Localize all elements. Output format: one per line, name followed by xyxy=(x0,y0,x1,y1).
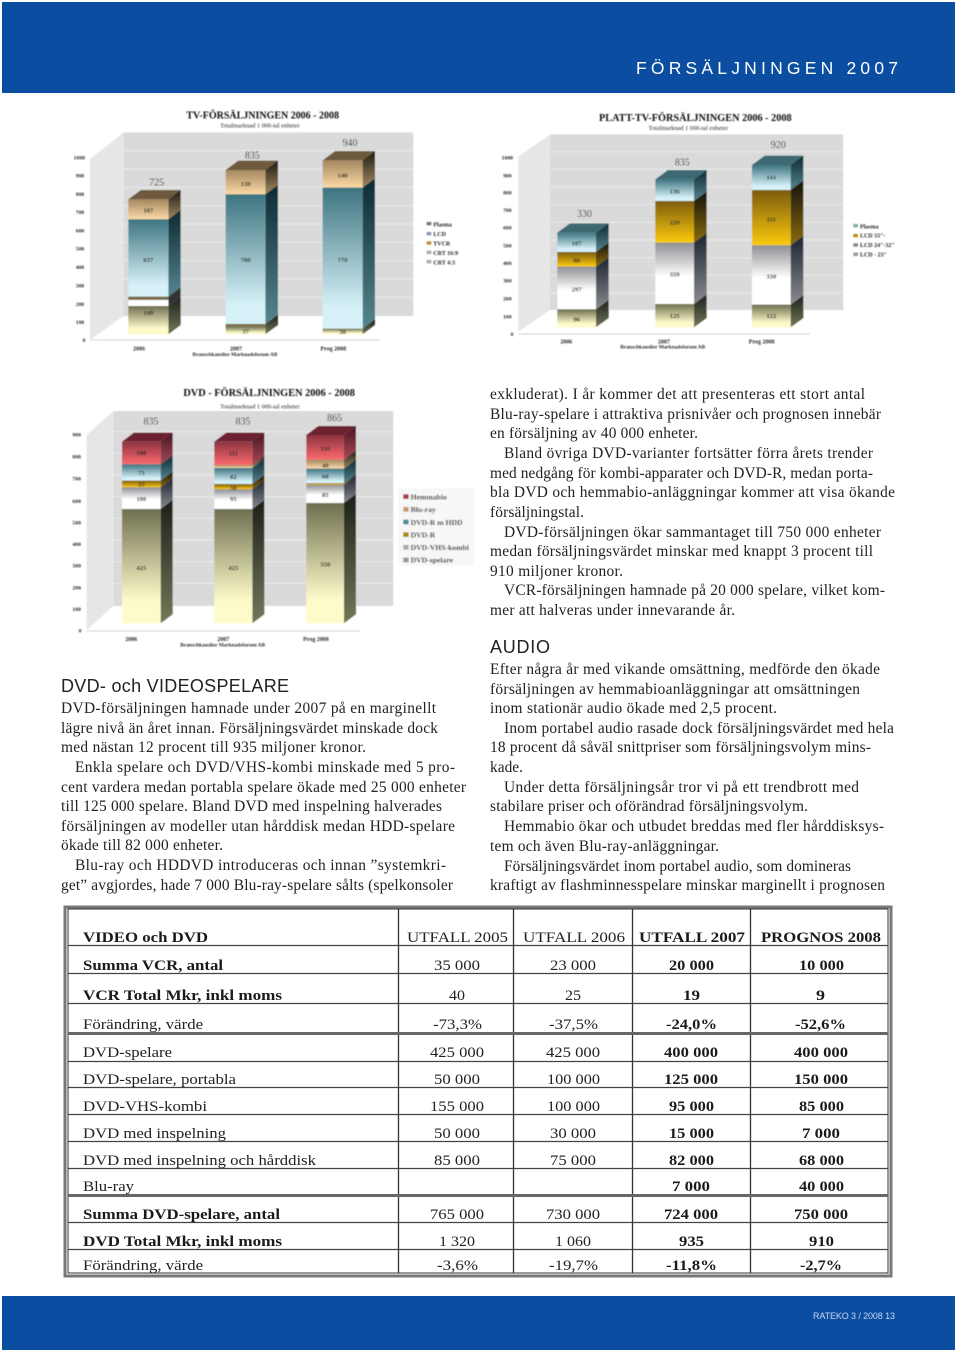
chart: TV-försäljningen 2006-2008: 700 xyxy=(76,210,84,216)
chart: DVD-försäljningen 2006-2008: 75 xyxy=(138,470,145,477)
text block: audio: Hemmabio ökar och utbudet breddas med fler hårddisksys- xyxy=(504,818,884,835)
legend: Hemmabio xyxy=(411,493,447,502)
bar 2006 xyxy=(122,433,173,623)
chart: TV-försäljningen 2006-2008: 140 xyxy=(338,172,348,179)
chart: TV-försäljningen 2006-2008: 2006 xyxy=(133,347,145,353)
chart: Platt-TV-försäljningen 2006-2008: 125 xyxy=(670,313,680,320)
legend xyxy=(398,488,474,566)
table header row: UTFALL 2005 xyxy=(407,930,508,946)
row: Blu-ray xyxy=(83,1179,844,1195)
row: Förändring, värde VCR: Förändring, värde xyxy=(83,1017,203,1033)
row: Summa DVD-spelare, antal: 724 000 xyxy=(664,1207,718,1223)
row: DVD-spelare: 400 000 xyxy=(794,1045,848,1061)
chart: TV-försäljningen 2006-2008: 400 xyxy=(76,265,84,271)
text block: audio: 18 procent då såväl snittpriser som försäljningsvolym mins- xyxy=(490,739,871,756)
row: Blu-ray: 7 000 xyxy=(672,1179,710,1195)
heading: DVD- och VIDEOSPELARE: DVD- och VIDEOSPELARE xyxy=(61,676,289,696)
legend: DVD-R xyxy=(411,530,436,539)
row: Förändring, värde VCR: -52,6% xyxy=(795,1017,846,1033)
row: DVD Total Mkr: DVD Total Mkr, inkl moms xyxy=(83,1234,282,1250)
text block: audio: Under detta försäljningsår tror vi på ett trendbrott med xyxy=(504,779,859,796)
chart: TV-försäljningen 2006-2008: 0 xyxy=(83,338,86,344)
row: DVD Total Mkr: 1 320 xyxy=(439,1234,475,1250)
chart: DVD-försäljningen 2006-2008: 835 xyxy=(235,416,250,427)
row: DVD-VHS-kombi xyxy=(83,1099,844,1115)
text block: DVD continued: medan försäljningsvärdet minskar med knappt 3 procent till xyxy=(490,543,873,560)
chart: Platt-TV-försäljningen 2006-2008: 311 xyxy=(766,216,776,223)
chart: TV-försäljningen 2006-2008: 900 xyxy=(76,174,84,180)
chart: TV-försäljningen 2006-2008: 600 xyxy=(76,228,84,234)
chart: DVD-försäljningen 2006-2008: 85 xyxy=(322,492,329,499)
chart: DVD-försäljningen 2006-2008: Prog 2008 xyxy=(303,637,329,643)
bar Prog 2008 xyxy=(306,426,356,623)
chart: Platt-TV-försäljningen 2006-2008: 700 xyxy=(503,208,512,214)
chart: DVD-försäljningen 2006-2008: 68 xyxy=(322,474,329,481)
bar 2006 xyxy=(128,190,181,334)
row: DVD-VHS-kombi: 100 000 xyxy=(547,1099,600,1115)
chart: DVD-försäljningen 2006-2008: 116 xyxy=(320,445,331,452)
legend: DVD-VHS-kombi xyxy=(411,543,470,552)
chart: Platt-TV-försäljningen 2006-2008: 136 xyxy=(670,188,680,195)
row: Blu-ray: 40 000 xyxy=(799,1179,844,1195)
row: Förändring, värde VCR: -73,3% xyxy=(433,1017,482,1033)
chart: DVD-försäljningen 2006-2008: Branschkanslier Marknadsforum AB xyxy=(180,643,266,649)
row: Summa VCR, antal xyxy=(83,958,844,974)
text block: DVD och videospelare xyxy=(61,700,466,894)
text block: audio: tem och även Blu-ray-anläggningar. xyxy=(490,838,719,855)
chart: TV-försäljningen 2006-2008: 200 xyxy=(76,302,84,308)
chart: DVD-försäljningen 2006-2008: Totalmarknad 1 000-tal enheter xyxy=(220,403,301,410)
table header row xyxy=(83,930,881,946)
chart: DVD-försäljningen 2006-2008: 82 xyxy=(230,474,237,481)
row: DVD-spelare: 425 000 xyxy=(546,1045,600,1061)
chart: DVD-försäljningen 2006-2008: 300 xyxy=(72,564,81,570)
row: DVD-spelare, portabla: 125 000 xyxy=(664,1072,718,1088)
row: DVD med inspelning: DVD med inspelning xyxy=(83,1126,227,1142)
text block: audio: kraftigt av flashminnesspelare minskar marginellt i prognosen xyxy=(490,877,885,894)
text block: audio: Försäljningsvärdet inom portabel audio, som domineras xyxy=(504,858,851,875)
row: DVD-spelare, portabla: DVD-spelare, portabla xyxy=(83,1072,236,1088)
chart: TV-försäljningen 2006-2008: 149 xyxy=(143,310,154,317)
row: VCR Total Mkr xyxy=(83,988,825,1004)
chart: Platt-TV-försäljningen 2006-2008: Branschkanslier Marknadsforum AB xyxy=(620,344,706,350)
text block: audio: stabilare priser och oförändrad försäljningsvolym. xyxy=(490,798,808,815)
text block: DVD continued: försäljningstal. xyxy=(490,504,584,521)
row: DVD Total Mkr: 910 xyxy=(809,1234,834,1250)
row: DVD Total Mkr: 935 xyxy=(679,1234,704,1250)
legend: Plasma xyxy=(860,225,879,231)
row: DVD med inspelning och hårddisk: 82 000 xyxy=(669,1153,714,1169)
table header row: UTFALL 2006 xyxy=(523,930,626,946)
text block: DVD continued: med nedgång för kombi-apparater och DVD-R, medan porta- xyxy=(490,465,873,482)
chart: Platt-TV-försäljningen 2006-2008: 100 xyxy=(503,314,512,320)
text block: DVD och videospelare: lägre nivå än året innan. Försäljningsvärdet minskade dock xyxy=(61,720,438,737)
table header row: UTFALL 2007 xyxy=(639,930,746,946)
chart: TV-försäljningen 2006-2008: Branschkanslier Marknadsforum AB xyxy=(193,352,278,358)
row: DVD-VHS-kombi: 85 000 xyxy=(799,1099,844,1115)
row: DVD-VHS-kombi: 95 000 xyxy=(669,1099,714,1115)
chart: TV-försäljningen 2006-2008: 138 xyxy=(241,181,251,188)
chart: Platt-TV-försäljningen 2006-2008: 2006 xyxy=(560,339,572,345)
chart: TV-försäljningen 2006-2008: 100 xyxy=(76,320,84,326)
row: Förändring, värde DVD xyxy=(83,1258,842,1274)
chart: Platt-TV-försäljningen 2006-2008: 600 xyxy=(503,226,512,232)
chart: Platt-TV-försäljningen 2006-2008: 80 xyxy=(573,257,581,264)
chart: Platt-TV-försäljningen 2006-2008: 1000 xyxy=(502,156,513,162)
table header row: VIDEO och DVD xyxy=(83,930,208,946)
chart: DVD-försäljningen 2006-2008: 400 xyxy=(72,542,81,548)
row: DVD-spelare, portabla: 100 000 xyxy=(547,1072,600,1088)
chart: DVD-försäljningen 2006-2008: 40 xyxy=(322,462,329,469)
text block: DVD continued: mer att halveras under innevarande år. xyxy=(490,602,735,619)
row: Summa VCR, antal: 23 000 xyxy=(550,958,596,974)
row: DVD med inspelning och hårddisk: 68 000 xyxy=(799,1153,844,1169)
row: Förändring, värde VCR xyxy=(83,1017,846,1033)
row: Summa VCR, antal: 10 000 xyxy=(799,958,844,974)
footer band xyxy=(2,1296,955,1350)
row: DVD med inspelning: 15 000 xyxy=(669,1126,714,1142)
row: Summa DVD-spelare, antal: Summa DVD-spelare, antal xyxy=(83,1207,280,1223)
chart: DVD-försäljningen 2006-2008: DVD - FÖRSÄLJNINGEN 2006 - 2008 xyxy=(183,386,355,399)
bar 2006 xyxy=(557,223,609,327)
chart: Platt-TV-försäljningen 2006-2008: 122 xyxy=(766,313,777,320)
text block: DVD och videospelare: försäljningen av modeller utan hårddisk medan HDD-spelare xyxy=(61,818,455,835)
chart: DVD-försäljningen 2006-2008: 111 xyxy=(229,451,238,458)
text block: DVD och videospelare: Blu-ray och HDDVD introduceras och innan ”systemkri- xyxy=(75,857,446,874)
legend: DVD-spelare xyxy=(411,556,454,565)
footer text: RATEKO 3 / 2008 13 xyxy=(813,1311,895,1321)
chart: TV-försäljningen 2006-2008: 107 xyxy=(143,207,154,214)
text block: DVD och videospelare: med nästan 12 procent till 935 miljoner kronor. xyxy=(61,739,366,756)
chart: TV-försäljningen 2006-2008: Totalmarknad 1 000-tal enheter xyxy=(220,122,301,129)
text block: DVD och videospelare: cent vardera medan portabla spelare ökade med 25 000 enheter xyxy=(61,779,466,796)
chart: DVD-försäljningen 2006-2008: 100 xyxy=(136,496,147,503)
bar Prog 2008 xyxy=(323,151,375,334)
chart: Platt-TV-försäljningen 2006-2008 xyxy=(502,111,895,350)
row: VCR Total Mkr: 25 xyxy=(565,988,581,1004)
chart: DVD-försäljningen 2006-2008: 425 xyxy=(136,565,147,572)
text block: DVD continued: Bland övriga DVD-varianter fortsätter förra årets trender xyxy=(504,445,873,462)
row: DVD-spelare: DVD-spelare xyxy=(83,1045,172,1061)
header title: FÖRSÄLJNINGEN 2007 xyxy=(636,58,898,78)
bar 2007 xyxy=(655,170,707,327)
text block: audio: kade. xyxy=(490,759,523,776)
text block: audio xyxy=(490,661,894,894)
chart: DVD-försäljningen 2006-2008: 500 xyxy=(72,521,81,527)
row: Blu-ray: Blu-ray xyxy=(83,1179,135,1195)
bar 2007 xyxy=(226,161,278,334)
legend xyxy=(853,224,895,259)
row: DVD-spelare: 425 000 xyxy=(430,1045,484,1061)
chart: Platt-TV-försäljningen 2006-2008: 330 xyxy=(766,273,777,280)
chart: DVD-försäljningen 2006-2008: 100 xyxy=(72,607,81,613)
legend: LCD xyxy=(433,232,447,238)
chart: DVD-försäljningen 2006-2008: 108 xyxy=(136,450,147,457)
chart: Platt-TV-försäljningen 2006-2008: Totalmarknad 1 000-tal enheter xyxy=(649,125,729,132)
chart: Platt-TV-försäljningen 2006-2008: 800 xyxy=(503,191,512,197)
bar Prog 2008 xyxy=(752,156,803,327)
chart: Platt-TV-försäljningen 2006-2008: 359 xyxy=(670,271,680,278)
chart: TV-försäljningen 2006-2008 xyxy=(74,108,458,358)
chart: DVD-försäljningen 2006-2008: 200 xyxy=(72,585,81,591)
row: Summa DVD-spelare, antal: 730 000 xyxy=(546,1207,600,1223)
row: Summa DVD-spelare, antal xyxy=(83,1207,848,1223)
chart: Platt-TV-försäljningen 2006-2008: 500 xyxy=(503,243,512,249)
row: DVD med inspelning och hårddisk xyxy=(83,1153,844,1169)
chart: DVD-försäljningen 2006-2008: 865 xyxy=(327,413,342,424)
chart: DVD-försäljningen 2006-2008: 95 xyxy=(230,496,237,503)
chart: TV-försäljningen 2006-2008: 300 xyxy=(76,283,84,289)
legend xyxy=(427,222,458,266)
text block: audio: Inom portabel audio rasade dock försäljningsvärdet med hela xyxy=(504,720,894,737)
chart: TV-försäljningen 2006-2008: 30 xyxy=(339,329,347,336)
row: Summa VCR, antal: 20 000 xyxy=(669,958,714,974)
text block: DVD continued: Blu-ray-spelare i attraktiva prisnivåer och prognosen innebär xyxy=(490,406,881,423)
chart: Platt-TV-försäljningen 2006-2008: 835 xyxy=(675,158,690,169)
text block: audio: Efter några år med vikande omsättning, medförde den ökade xyxy=(490,661,880,678)
chart: DVD-försäljningen 2006-2008: 2006 xyxy=(125,637,137,643)
text block: DVD och videospelare: till 125 000 spelare. Bland DVD med inspelning halverades xyxy=(61,798,442,815)
text block: audio: inom stationär audio ökade med 2,5 procent. xyxy=(490,700,777,717)
text block: DVD och videospelare: DVD-försäljningen hamnade under 2007 på en marginellt xyxy=(61,700,437,717)
chart: DVD-försäljningen 2006-2008: 0 xyxy=(79,629,82,635)
legend: DVD-R m HDD xyxy=(411,518,463,527)
text block: DVD continued: 910 miljoner kronor. xyxy=(490,563,623,580)
chart: DVD-försäljningen 2006-2008: 835 xyxy=(143,416,158,427)
chart: TV-försäljningen 2006-2008: 725 xyxy=(149,177,164,188)
text block: DVD continued: VCR-försäljningen hamnade på 20 000 spelare, vilket kom- xyxy=(504,582,885,599)
row: Förändring, värde DVD: Förändring, värde xyxy=(83,1258,203,1274)
chart: DVD-försäljningen 2006-2008: 600 xyxy=(72,499,81,505)
row: VCR Total Mkr: 40 xyxy=(449,988,465,1004)
chart: DVD-försäljningen 2006-2008: 35 xyxy=(138,481,145,488)
row: Förändring, värde DVD: -2,7% xyxy=(800,1258,842,1274)
chart: Platt-TV-försäljningen 2006-2008: 900 xyxy=(503,173,512,179)
row: DVD med inspelning och hårddisk: 75 000 xyxy=(550,1153,596,1169)
heading: AUDIO: AUDIO xyxy=(490,637,550,657)
row: Förändring, värde DVD: -3,6% xyxy=(437,1258,478,1274)
text block: audio: försäljningen av hemmabioanläggningar att omsättningen xyxy=(490,681,860,698)
chart: DVD-försäljningen 2006-2008: 550 xyxy=(320,562,331,569)
chart: TV-försäljningen 2006-2008: 37 xyxy=(242,328,250,335)
chart: DVD-försäljningen 2006-2008: 900 xyxy=(72,433,81,439)
text block: DVD och videospelare: ökade till 82 000 enheter. xyxy=(61,837,223,854)
row: DVD-VHS-kombi: 155 000 xyxy=(430,1099,484,1115)
chart: TV-försäljningen 2006-2008: 637 xyxy=(143,257,154,264)
row: VCR Total Mkr: 9 xyxy=(816,988,825,1004)
legend: LCD 24"-32" xyxy=(860,243,895,249)
chart: Platt-TV-försäljningen 2006-2008: 96 xyxy=(573,317,581,324)
legend: TVCR xyxy=(433,241,451,247)
row: Förändring, värde VCR: -37,5% xyxy=(549,1017,598,1033)
chart: Platt-TV-försäljningen 2006-2008: 300 xyxy=(503,279,512,285)
row: Förändring, värde DVD: -11,8% xyxy=(666,1258,717,1274)
row: Summa VCR, antal: Summa VCR, antal xyxy=(83,958,223,974)
legend: Blu-ray xyxy=(411,505,436,514)
chart: TV-försäljningen 2006-2008: 770 xyxy=(338,257,348,264)
chart: Platt-TV-försäljningen 2006-2008: 920 xyxy=(771,140,786,151)
row: DVD-spelare xyxy=(83,1045,848,1061)
text block: DVD continued: DVD-försäljningen ökar sammantaget till 750 000 enheter xyxy=(504,524,881,541)
row: DVD med inspelning och hårddisk: 85 000 xyxy=(434,1153,480,1169)
row: Summa VCR, antal: 35 000 xyxy=(434,958,480,974)
text block: DVD continued xyxy=(490,386,895,619)
row: DVD med inspelning: 30 000 xyxy=(550,1126,596,1142)
chart: Platt-TV-försäljningen 2006-2008: 297 xyxy=(572,287,582,294)
text block: DVD continued: exkluderat). I år kommer det att presenteras ett stort antal xyxy=(490,386,865,403)
chart: Platt-TV-försäljningen 2006-2008: 141 xyxy=(766,175,776,182)
row: DVD med inspelning: 7 000 xyxy=(802,1126,840,1142)
row: Förändring, värde VCR: -24,0% xyxy=(666,1017,717,1033)
chart: DVD-försäljningen 2006-2008: 425 xyxy=(228,565,239,572)
legend: LCD - 23" xyxy=(860,253,887,259)
row: DVD-spelare, portabla xyxy=(83,1072,848,1088)
chart: TV-försäljningen 2006-2008: 835 xyxy=(245,151,260,162)
chart: TV-försäljningen 2006-2008: 2007 xyxy=(230,347,242,353)
chart: DVD-försäljningen 2006-2008: 700 xyxy=(72,476,81,482)
row: VCR Total Mkr: VCR Total Mkr, inkl moms xyxy=(83,988,282,1004)
chart: Platt-TV-försäljningen 2006-2008: PLATT-TV-FÖRSÄLJNINGEN 2006 - 2008 xyxy=(599,111,792,124)
row: DVD med inspelning xyxy=(83,1126,840,1142)
chart: Platt-TV-försäljningen 2006-2008: 0 xyxy=(511,332,514,338)
row: DVD Total Mkr xyxy=(83,1234,834,1250)
row: DVD-spelare, portabla: 150 000 xyxy=(794,1072,848,1088)
row: Summa DVD-spelare, antal: 750 000 xyxy=(794,1207,848,1223)
table header row: PROGNOS 2008 xyxy=(761,930,881,946)
chart: Platt-TV-försäljningen 2006-2008: 229 xyxy=(670,220,680,227)
chart: TV-försäljningen 2006-2008: 700 xyxy=(241,257,251,264)
chart: TV-försäljningen 2006-2008: 800 xyxy=(76,192,84,198)
text block: DVD och videospelare: Enkla spelare och DVD/VHS-kombi minskade med 5 pro- xyxy=(75,759,455,776)
row: Förändring, värde DVD: -19,7% xyxy=(549,1258,598,1274)
text block: DVD och videospelare: get” avgjordes, hade 7 000 Blu-ray-spelare sålts (spelkonsoler xyxy=(61,877,453,894)
legend: LCD 33"- xyxy=(860,233,885,239)
chart: DVD-försäljningen 2006-2008 xyxy=(72,386,474,649)
row: DVD med inspelning: 50 000 xyxy=(434,1126,480,1142)
chart: TV-försäljningen 2006-2008: 500 xyxy=(76,247,84,253)
row: DVD-spelare, portabla: 50 000 xyxy=(434,1072,480,1088)
chart: DVD-försäljningen 2006-2008: 30 xyxy=(230,485,237,492)
chart: Platt-TV-försäljningen 2006-2008: 200 xyxy=(503,296,512,302)
row: DVD med inspelning och hårddisk: DVD med inspelning och hårddisk xyxy=(83,1153,317,1169)
chart: Platt-TV-försäljningen 2006-2008: 107 xyxy=(572,240,582,247)
chart: Platt-TV-försäljningen 2006-2008: 400 xyxy=(503,261,512,267)
header band xyxy=(2,2,955,93)
chart: TV-försäljningen 2006-2008: Prog 2008 xyxy=(320,347,346,353)
legend: Plasma xyxy=(433,223,452,229)
row: DVD-VHS-kombi: DVD-VHS-kombi xyxy=(83,1099,207,1115)
chart: TV-försäljningen 2006-2008: 940 xyxy=(342,138,357,149)
row: DVD-spelare: 400 000 xyxy=(664,1045,718,1061)
row: Summa DVD-spelare, antal: 765 000 xyxy=(430,1207,484,1223)
text block: DVD continued: bla DVD och hemmabio-anläggningar kommer att visa ökande xyxy=(490,484,895,501)
chart: TV-försäljningen 2006-2008: 1000 xyxy=(74,155,85,161)
table: video och DVD xyxy=(65,907,891,1276)
chart: DVD-försäljningen 2006-2008: 2007 xyxy=(217,637,229,643)
row: VCR Total Mkr: 19 xyxy=(683,988,700,1004)
bar 2007 xyxy=(214,433,264,623)
chart: TV-försäljningen 2006-2008: TV-FÖRSÄLJNINGEN 2006 - 2008 xyxy=(186,108,339,121)
chart: Platt-TV-försäljningen 2006-2008: 330 xyxy=(577,209,592,220)
chart: Platt-TV-försäljningen 2006-2008: 2007 xyxy=(658,339,670,345)
text block: DVD continued: en försäljning av 40 000 enheter. xyxy=(490,425,698,442)
chart: DVD-försäljningen 2006-2008: 800 xyxy=(72,454,81,460)
legend: CRT 16:9 xyxy=(433,251,458,257)
row: DVD Total Mkr: 1 060 xyxy=(555,1234,591,1250)
chart: Platt-TV-försäljningen 2006-2008: Prog 2008 xyxy=(749,339,774,345)
legend: CRT 4:3 xyxy=(433,260,455,266)
